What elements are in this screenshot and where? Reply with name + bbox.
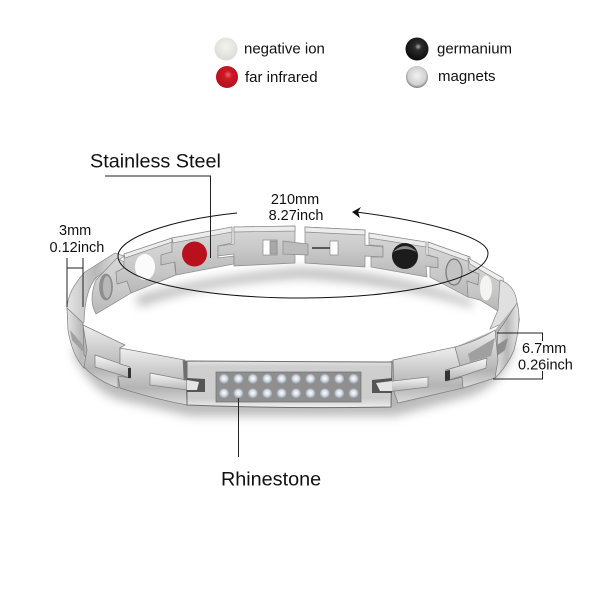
front band xyxy=(67,303,520,408)
white bead left xyxy=(135,254,155,280)
dimension: length with arrow ellipse xyxy=(118,192,488,298)
white bead right xyxy=(480,276,492,300)
soft shadow xyxy=(72,268,515,416)
magnet link xyxy=(428,242,479,297)
left link 2 xyxy=(118,348,187,405)
label: magnets: magnets xyxy=(438,68,496,85)
dimension: width 3mm xyxy=(50,223,104,307)
dimension: width 3mm: 3mm xyxy=(59,223,91,239)
dimension: length with arrow ellipse: 210mm xyxy=(271,192,319,208)
base silhouette xyxy=(67,303,520,407)
left side xyxy=(67,308,96,372)
callout: rhinestone xyxy=(221,398,321,490)
center-left link xyxy=(218,226,295,266)
legend xyxy=(214,38,512,88)
right link 2 xyxy=(393,347,463,403)
label: negative ion: negative ion xyxy=(244,40,325,58)
rhinestone panel xyxy=(216,372,361,402)
icon: magnets bead xyxy=(406,66,428,88)
black bead xyxy=(392,243,418,269)
gray magnet bead left xyxy=(100,274,112,300)
red link xyxy=(161,227,234,275)
back band xyxy=(67,226,517,329)
icon: germanium bead xyxy=(406,38,428,60)
dimension: width 3mm: 0.12inch xyxy=(50,240,104,256)
right link 1 xyxy=(446,330,498,388)
callout: stainless steel: Stainless Steel xyxy=(90,150,221,172)
bracelet xyxy=(67,226,520,416)
icon: negative ion bead xyxy=(214,38,238,60)
dimension: length with arrow ellipse: 8.27inch xyxy=(269,208,323,224)
dimension: width 6.7mm xyxy=(493,333,573,379)
clasp xyxy=(283,241,308,255)
label: far infrared: far infrared xyxy=(245,69,318,86)
label: germanium: germanium xyxy=(437,40,512,58)
callout: stainless steel xyxy=(90,150,221,258)
right outer side xyxy=(495,303,519,378)
white link xyxy=(116,238,176,293)
white link right xyxy=(467,258,503,311)
icon: far infrared bead xyxy=(216,66,238,88)
magnet bead right xyxy=(446,259,462,285)
left turn xyxy=(67,253,124,324)
dimension: width 6.7mm: 6.7mm xyxy=(522,341,566,357)
dark gaps xyxy=(445,370,450,381)
dimension: width 6.7mm: 0.26inch xyxy=(518,358,573,374)
center-right link xyxy=(305,227,383,267)
left link 1 xyxy=(83,325,130,388)
callout: rhinestone: Rhinestone xyxy=(221,468,321,490)
right turn xyxy=(490,280,517,329)
red bead xyxy=(182,242,207,266)
center plate xyxy=(187,361,392,408)
black link xyxy=(369,233,438,277)
